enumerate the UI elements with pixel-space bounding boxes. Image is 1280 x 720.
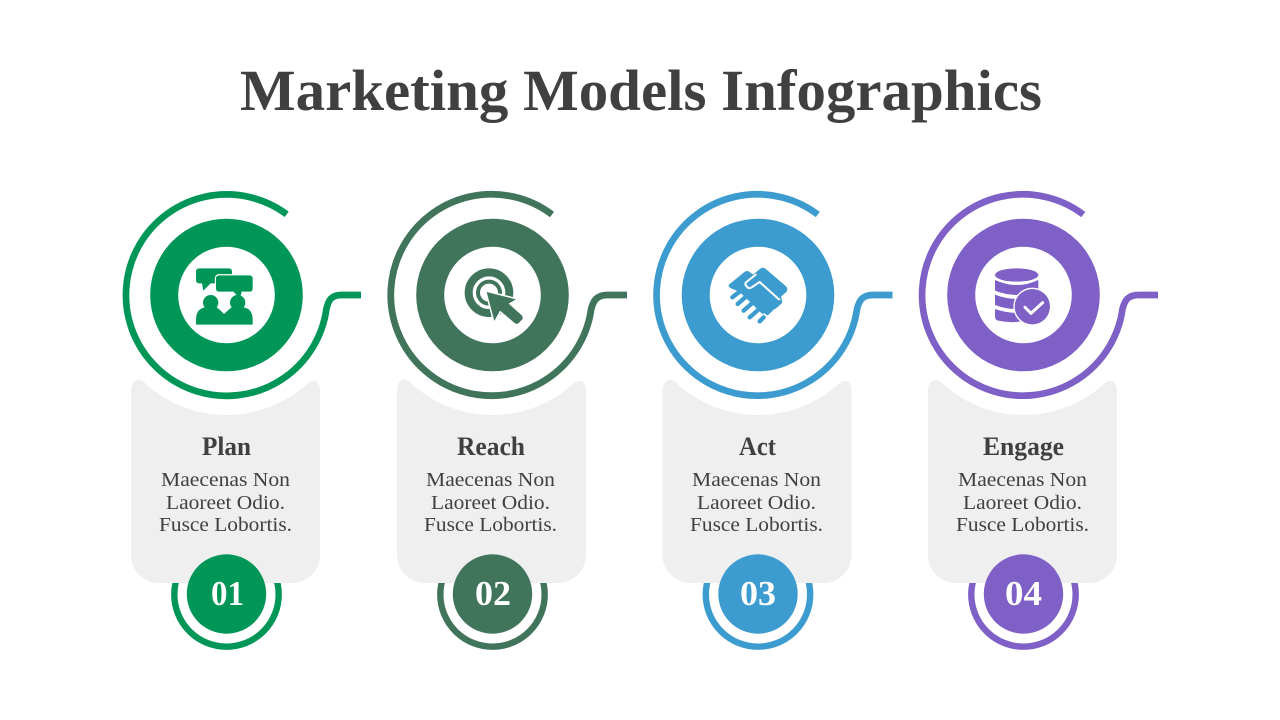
panel: act	[657, 194, 892, 647]
number badge: 03	[740, 574, 776, 613]
donut	[696, 233, 820, 357]
card	[131, 380, 320, 583]
spiral ring	[657, 194, 892, 396]
number badge	[718, 554, 798, 634]
body text: Fusce Lobortis.	[956, 514, 1089, 536]
heading: Engage	[983, 432, 1064, 461]
number badge	[984, 554, 1063, 634]
body text: Maecenas Non	[958, 469, 1087, 491]
panel: plan	[126, 194, 361, 647]
body text: Maecenas Non	[426, 469, 555, 491]
bottom ring	[174, 542, 279, 647]
donut	[961, 233, 1086, 357]
heading: Plan	[202, 432, 252, 461]
body text: Laoreet Odio.	[697, 492, 816, 514]
card	[928, 380, 1117, 583]
heading: Act	[739, 432, 776, 461]
number badge: 02	[475, 574, 511, 613]
body text: Laoreet Odio.	[431, 492, 550, 514]
body text: Laoreet Odio.	[963, 492, 1082, 514]
bottom ring	[440, 542, 545, 647]
number badge: 01	[211, 574, 244, 613]
body text	[159, 469, 292, 536]
spiral ring	[922, 194, 1158, 396]
spiral ring	[126, 194, 361, 396]
body text: Maecenas Non	[161, 469, 290, 491]
panel: engage	[922, 194, 1158, 647]
body text: Maecenas Non	[692, 469, 821, 491]
donut	[430, 233, 555, 357]
number badge	[187, 554, 266, 634]
title: Marketing Models Infographics	[240, 58, 1042, 123]
body text: Fusce Lobortis.	[159, 514, 292, 536]
body text	[956, 469, 1089, 536]
heading: Reach	[457, 432, 526, 461]
icon: handshake	[729, 268, 787, 321]
icon: database check	[995, 268, 1050, 324]
card	[662, 380, 852, 583]
panel: reach	[391, 194, 627, 647]
number badge: 04	[1005, 574, 1042, 613]
body text	[690, 469, 823, 536]
body text: Fusce Lobortis.	[424, 514, 557, 536]
body text: Laoreet Odio.	[166, 492, 285, 514]
body text	[424, 469, 557, 536]
icon: people talking	[196, 268, 253, 325]
bottom ring	[706, 542, 810, 647]
bottom ring	[971, 542, 1076, 647]
spiral ring	[391, 194, 627, 396]
body text: Fusce Lobortis.	[690, 514, 823, 536]
donut	[164, 233, 289, 357]
icon: target cursor	[469, 272, 523, 324]
number badge	[453, 554, 532, 634]
card	[397, 380, 586, 583]
